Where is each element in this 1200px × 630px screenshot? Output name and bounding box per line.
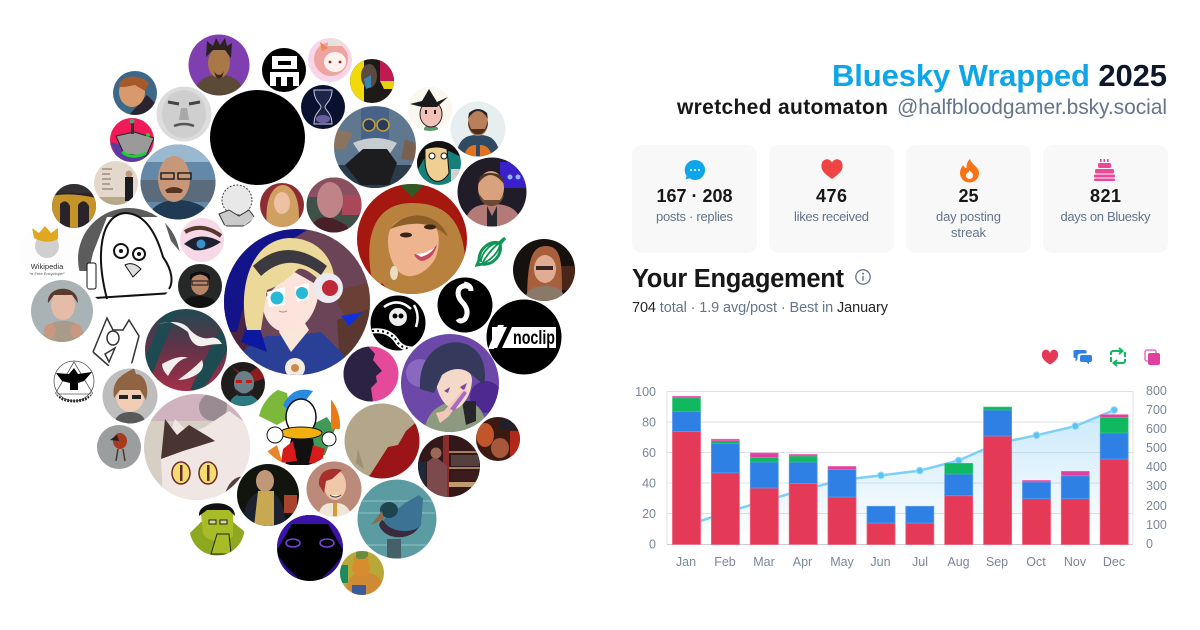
month labels: Jul — [912, 555, 928, 569]
avatar: orange cat — [340, 551, 384, 595]
left axis labels: 80 — [642, 416, 656, 430]
icon: speech bubble — [685, 160, 705, 180]
month labels: Nov — [1064, 555, 1087, 569]
avatar: red dress woman — [356, 183, 468, 295]
month labels: Oct — [1026, 555, 1046, 569]
left axis and gridlines — [667, 392, 1133, 544]
stat card: likes received — [769, 145, 894, 253]
month labels: Jun — [870, 555, 891, 569]
cumulative line — [686, 410, 1114, 526]
avatar: bald man with glasses — [140, 144, 216, 220]
avatar cluster — [19, 34, 576, 595]
engagement summary: 704 total · 1.9 avg/post · Best in January — [632, 300, 889, 316]
left axis labels: 100 — [635, 385, 656, 399]
avatar: purple haired anime — [400, 333, 502, 433]
avatar: man at bookshelf — [417, 434, 481, 498]
stat card: days on Bluesky: days on Bluesky — [1060, 209, 1151, 224]
reposts — [672, 398, 1128, 474]
avatar: brown haired cartoon glasses — [102, 368, 158, 424]
avatar: red haired woman glasses — [512, 238, 576, 302]
month labels: Dec — [1103, 555, 1125, 569]
avatar: red hair cartoon — [306, 461, 362, 517]
month labels: Jan — [676, 555, 696, 569]
right axis labels: 200 — [1146, 499, 1167, 513]
avatar: hulk cartoon — [189, 500, 245, 556]
avatar: skull and tentacle — [370, 295, 426, 351]
right axis labels: 400 — [1146, 460, 1167, 474]
legend icon: reposts — [1111, 348, 1125, 366]
chart: monthly engagement — [635, 384, 1167, 569]
stat card: posting streak: streak — [951, 225, 986, 240]
avatar: woman by white wall — [94, 161, 138, 205]
stat card: posts and replies: 167 · 208 — [656, 186, 732, 206]
avatar: black monogram logo — [262, 48, 306, 92]
avatar: robot on pink — [110, 118, 154, 162]
stat card: likes received: 476 — [816, 186, 847, 206]
avatar: wikipedia parody logo: Wikipedia — [31, 262, 64, 271]
icon: heart — [821, 159, 843, 179]
avatar: tan wall with red — [344, 403, 420, 479]
title: Bluesky Wrapped 2025 — [832, 58, 1167, 93]
avatar: witch hat cartoon — [408, 87, 452, 131]
avatar: eye makeup — [180, 218, 224, 262]
avatar: cat milk carton — [143, 393, 251, 501]
right axis labels: 800 — [1146, 384, 1167, 398]
avatar: big ink sketch — [78, 208, 180, 300]
avatar: man pink lit — [306, 177, 362, 233]
month labels: Apr — [793, 555, 812, 569]
right axis labels: 500 — [1146, 441, 1167, 455]
avatar: young man photo — [30, 279, 94, 343]
icon: info — [856, 270, 870, 284]
avatar: cyberpunk on yellow — [350, 59, 394, 103]
icon: flame — [960, 159, 979, 182]
avatar: line drawing sketch — [218, 184, 254, 226]
avatar: owl in armor — [333, 105, 417, 189]
display name: wretched automaton — [676, 96, 888, 119]
avatar: bearded man orange jacket — [450, 101, 506, 157]
right axis labels: 600 — [1146, 422, 1167, 436]
stat card: posting streak — [906, 145, 1031, 253]
right axis labels: 300 — [1146, 479, 1167, 493]
stat card: posts and replies — [632, 145, 757, 253]
avatar: purple lit black face — [276, 514, 344, 582]
right axis labels: 100 — [1146, 518, 1167, 532]
avatar: greyscale face on moon — [156, 86, 212, 142]
avatar: large solid black — [210, 90, 305, 185]
month labels: Mar — [753, 555, 775, 569]
right axis labels: 700 — [1146, 403, 1167, 417]
avatar: duck on water — [357, 479, 437, 559]
avatar: yellow arches — [52, 184, 96, 228]
left axis labels — [635, 385, 656, 552]
avatar: triangle crow emblem — [52, 360, 96, 404]
avatar: man blue background — [113, 71, 157, 115]
left axis labels: 60 — [642, 446, 656, 460]
left axis labels: 0 — [649, 538, 656, 552]
likes — [672, 431, 1128, 544]
avatar: feather bird logo — [144, 308, 228, 392]
left axis labels: 40 — [642, 476, 656, 490]
legend — [1042, 348, 1160, 366]
avatar: man dark glasses — [178, 264, 222, 308]
avatar: wikipedia parody logo: The Free Encyclopedia — [26, 271, 68, 276]
handle: @halfbloodgamer.bsky.social — [897, 96, 1167, 119]
heading: your engagement: Your Engagement — [632, 265, 844, 293]
line points — [839, 407, 1118, 483]
avatar: pink anime girl — [308, 38, 352, 82]
stat card: posting streak: 25 — [958, 186, 978, 206]
month labels: May — [830, 555, 855, 569]
cumulative area — [686, 410, 1114, 544]
icon: birthday cake — [1094, 159, 1115, 181]
stat card: days on Bluesky — [1043, 145, 1168, 253]
avatar: noclip logo: noclip — [513, 328, 555, 349]
month labels: Sep — [986, 555, 1008, 569]
month labels — [676, 555, 1125, 569]
avatar: bearded cyberpunk man — [221, 362, 265, 406]
bars — [672, 396, 1128, 544]
stat card: posts and replies: posts · replies — [656, 209, 734, 224]
left axis labels: 20 — [642, 507, 656, 521]
avatar: blonde woman — [260, 183, 304, 227]
avatar: donald duck family — [257, 383, 343, 467]
avatar: aigis anime character — [223, 224, 371, 378]
right axis labels: 0 — [1146, 537, 1153, 551]
avatar: bald man yellow shirt — [236, 463, 300, 527]
avatar: hourglass — [301, 85, 345, 129]
right axis labels — [1146, 384, 1167, 551]
month labels: Feb — [714, 555, 736, 569]
month labels: Aug — [947, 555, 970, 569]
stat card: likes received: likes received — [794, 209, 869, 224]
avatar: wikipedia parody logo — [28, 226, 65, 276]
legend icon: likes — [1042, 350, 1058, 364]
avatar: face silhouette on pink — [343, 346, 399, 402]
avatar: noclip logo — [486, 299, 562, 375]
avatar: black S logo — [437, 277, 493, 333]
avatar: orange closeup — [476, 417, 520, 461]
avatar: green onion logo — [474, 236, 506, 267]
avatar: man with blue lights — [457, 157, 528, 227]
legend icon: quotes — [1145, 350, 1160, 365]
avatar: cartoon man glasses — [417, 141, 461, 185]
quotes — [672, 396, 1128, 482]
stat card: days on Bluesky: 821 — [1090, 186, 1121, 206]
replies — [672, 410, 1128, 523]
avatar: purple portrait — [188, 34, 250, 96]
avatar: red bird on grey — [97, 425, 141, 469]
legend icon: replies — [1074, 350, 1092, 364]
avatar: cat line drawing — [89, 312, 145, 368]
stat card: posting streak: day posting — [936, 209, 1001, 224]
